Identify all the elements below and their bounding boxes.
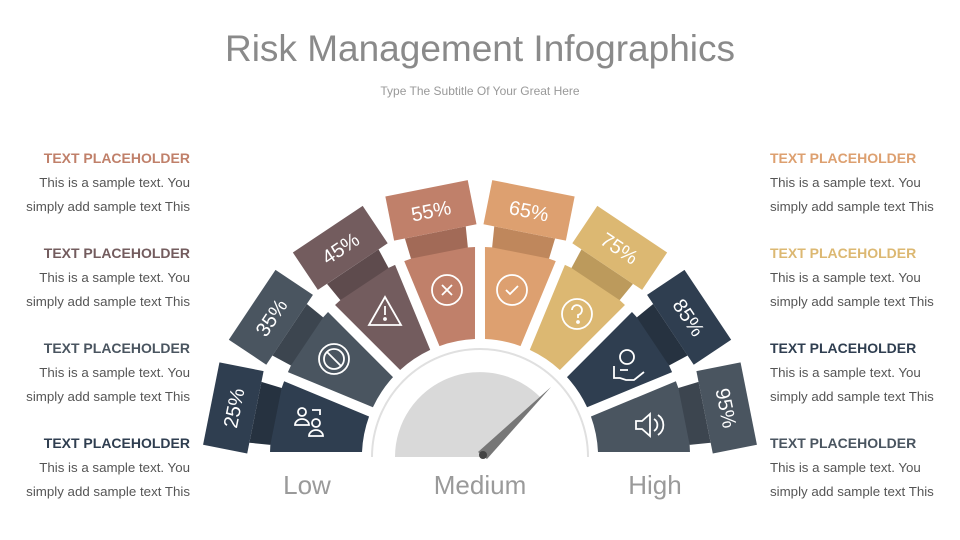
left text 4: TEXT PLACEHOLDER	[44, 435, 190, 451]
segment 95%	[586, 362, 757, 475]
right text 1: This is a sample text. You	[770, 175, 921, 190]
segment 55%: 55%	[409, 197, 453, 226]
left text 2: TEXT PLACEHOLDER	[44, 245, 190, 261]
left text 1: simply add sample text This	[26, 199, 190, 214]
segment 35%: 35%	[252, 295, 293, 341]
left text 1: TEXT PLACEHOLDER	[44, 150, 190, 166]
left text 4	[26, 435, 190, 499]
subtitle: Type The Subtitle Of Your Great Here	[380, 84, 580, 98]
right text 3: simply add sample text This	[770, 389, 934, 404]
segment 35%	[229, 270, 406, 427]
left text 1: This is a sample text. You	[39, 175, 190, 190]
right text 2: TEXT PLACEHOLDER	[770, 245, 916, 261]
segment 25%	[203, 362, 374, 475]
right text 4	[770, 435, 934, 499]
segment 55%	[385, 180, 498, 351]
right text 1: simply add sample text This	[770, 199, 934, 214]
left text 4: This is a sample text. You	[39, 460, 190, 475]
segment 75%	[510, 206, 667, 383]
segment 25%: 25%	[220, 386, 250, 430]
right text 1	[770, 150, 934, 214]
icon: question	[562, 299, 592, 329]
icon: users swap	[295, 408, 323, 436]
scale labels: Medium	[434, 470, 526, 500]
right text 4: TEXT PLACEHOLDER	[770, 435, 916, 451]
icon: cancel	[432, 275, 462, 305]
left text 2	[26, 245, 190, 309]
scale labels: Low	[283, 470, 331, 500]
right text 2: simply add sample text This	[770, 294, 934, 309]
segment 45%: 45%	[318, 229, 364, 269]
icon: prohibited	[319, 344, 349, 374]
segment 65%	[462, 180, 575, 351]
title: Risk Management Infographics	[225, 28, 735, 69]
right text 4: This is a sample text. You	[770, 460, 921, 475]
left text 3: simply add sample text This	[26, 389, 190, 404]
icon: warning	[369, 297, 401, 325]
icon: speaker	[636, 414, 663, 436]
icon: check	[497, 275, 527, 305]
left text 4: simply add sample text This	[26, 484, 190, 499]
left text 3: This is a sample text. You	[39, 365, 190, 380]
segment 45%	[293, 206, 450, 383]
gauge dial	[360, 349, 600, 540]
right text 3: This is a sample text. You	[770, 365, 921, 380]
icons	[295, 275, 663, 436]
right text 2	[770, 245, 934, 309]
right text 2: This is a sample text. You	[770, 270, 921, 285]
left text 3: TEXT PLACEHOLDER	[44, 340, 190, 356]
segment 85%	[554, 270, 731, 427]
segment 95%: 95%	[711, 386, 740, 430]
right text 4: simply add sample text This	[770, 484, 934, 499]
right text 3	[770, 340, 934, 404]
needle	[478, 387, 551, 459]
scale labels: High	[628, 470, 682, 500]
scale labels	[283, 470, 682, 500]
left text 2: This is a sample text. You	[39, 270, 190, 285]
left text 1	[26, 150, 190, 214]
right text 3: TEXT PLACEHOLDER	[770, 340, 916, 356]
segment 85%: 85%	[668, 295, 708, 341]
segment 65%: 65%	[507, 197, 551, 227]
right text 1: TEXT PLACEHOLDER	[770, 150, 916, 166]
segment 75%: 75%	[596, 229, 642, 270]
icon: money hand	[614, 350, 644, 380]
left text 3	[26, 340, 190, 404]
left text 2: simply add sample text This	[26, 294, 190, 309]
